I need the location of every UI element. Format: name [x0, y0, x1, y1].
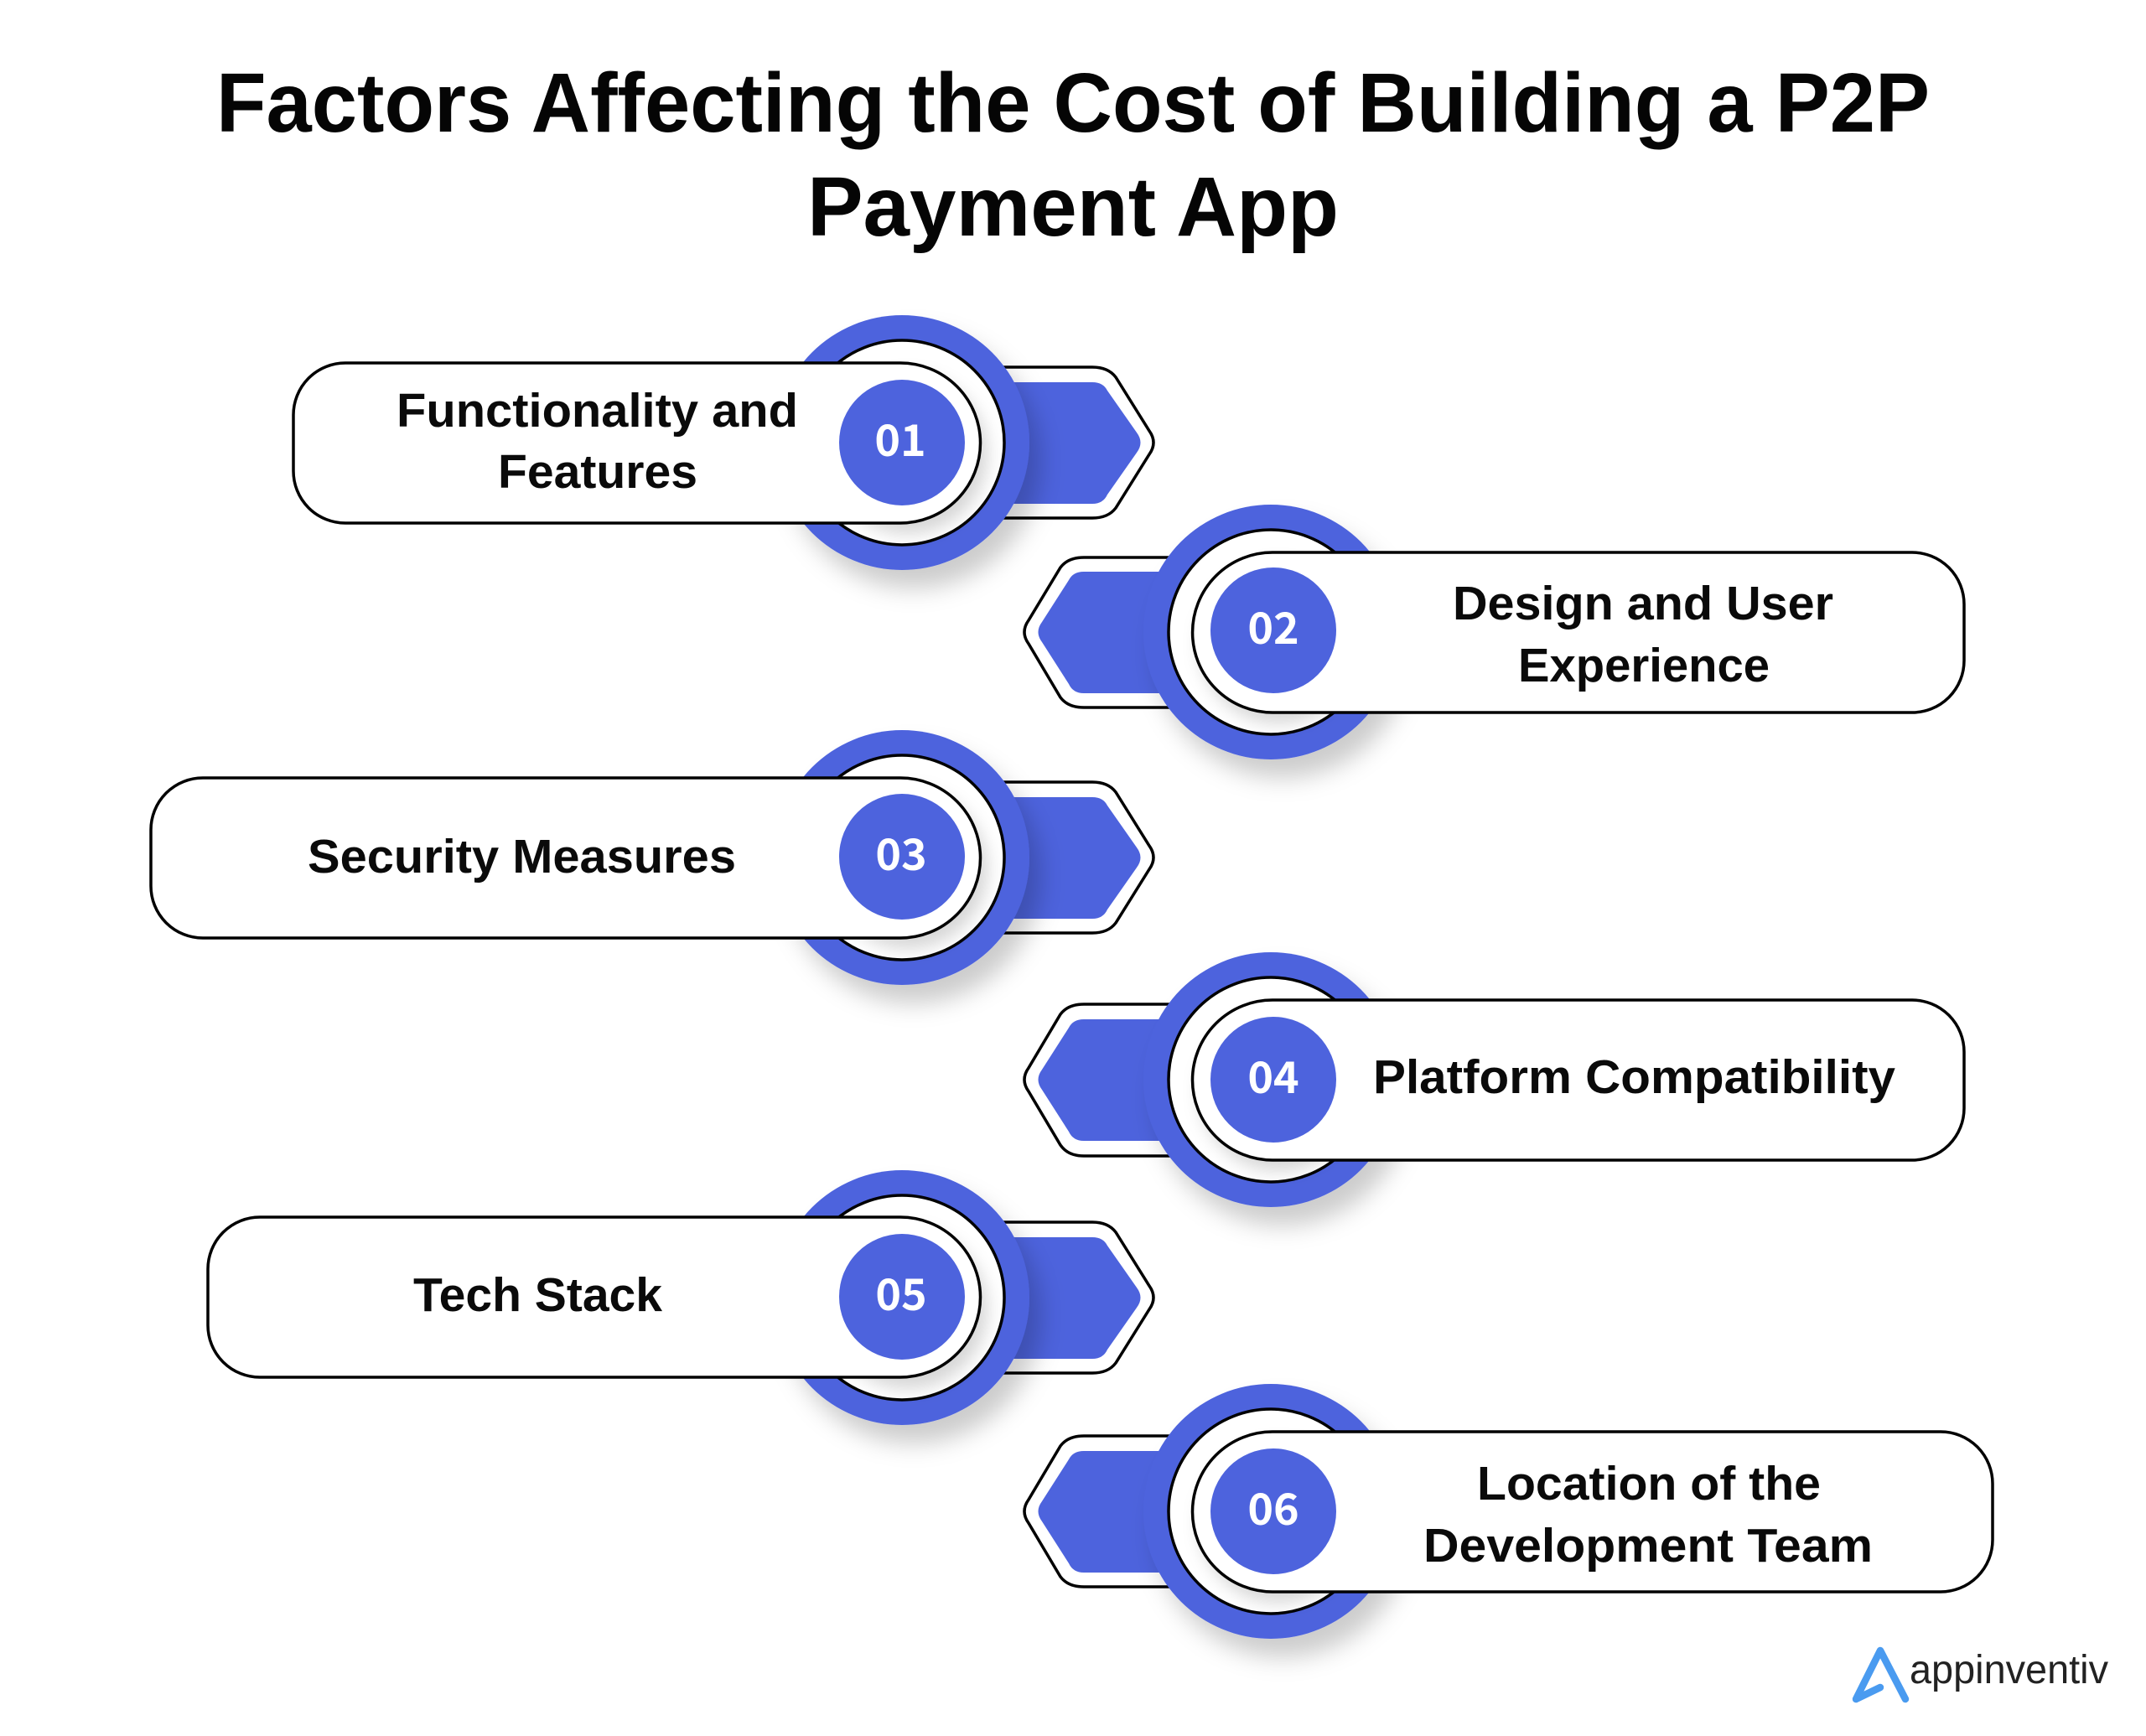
panel: factor 05: [208, 1170, 1153, 1425]
title: Factors Affecting the Cost of Building a P2P: [216, 56, 1930, 150]
arrow: 05: [964, 1222, 1153, 1373]
circle: 05: [775, 1170, 1029, 1425]
number badge: 04: 04: [1247, 1043, 1299, 1106]
label: 01: [397, 384, 798, 499]
label: 04: Platform Compatibility: [1373, 1050, 1895, 1104]
label: 02: Experience: [1518, 639, 1770, 692]
label: 06: Development Team: [1423, 1519, 1873, 1573]
pill: 06: [1192, 1432, 1993, 1592]
arrow: 02: [1024, 557, 1207, 707]
circle: 06: [1143, 1384, 1398, 1639]
number badge: 03: [839, 794, 965, 920]
label: 02: [1453, 577, 1833, 692]
panel: factor 06: [1024, 1384, 1993, 1639]
title: [216, 56, 1930, 254]
title: Payment App: [807, 160, 1339, 254]
logo: appinventiv: [1856, 1648, 2108, 1699]
number badge: 05: [839, 1234, 965, 1360]
number badge: 02: [1210, 567, 1336, 693]
label: 06: Location of the: [1477, 1457, 1821, 1511]
circle: 01: [775, 315, 1029, 570]
pill: 04: [1192, 1000, 1964, 1160]
panel: factor 03: [151, 730, 1153, 985]
panel: factor 01: [293, 315, 1153, 570]
arrow: 06: [1024, 1436, 1207, 1587]
pill: 01: [293, 363, 981, 523]
circle: 02: [1143, 505, 1398, 759]
number badge: 06: 06: [1247, 1474, 1299, 1537]
number badge: 06: [1210, 1448, 1336, 1574]
circle: 04: [1143, 952, 1398, 1207]
number badge: 04: [1210, 1017, 1336, 1143]
number badge: 02: 02: [1247, 593, 1299, 656]
arrow: 03: [964, 782, 1153, 933]
label: 01: Functionality and: [397, 384, 798, 438]
label: 02: Design and User: [1453, 577, 1833, 630]
label: 06: [1423, 1457, 1873, 1573]
pill: 05: [208, 1217, 981, 1377]
label: 05: Tech Stack: [413, 1268, 662, 1322]
icon: logo mark: [1856, 1650, 1905, 1699]
number badge: 03: 03: [875, 820, 927, 883]
pill: 02: [1193, 552, 1964, 713]
number badge: 01: [839, 380, 965, 505]
circle: 03: [775, 730, 1029, 985]
arrow: 01: [964, 367, 1153, 518]
panel: factor 02: [1024, 505, 1964, 759]
arrow: 04: [1024, 1004, 1207, 1156]
number badge: 05: 05: [875, 1260, 927, 1323]
pill: 03: [151, 778, 981, 938]
label: 03: Security Measures: [308, 830, 736, 884]
number badge: 01: 01: [874, 406, 926, 469]
logo wordmark: appinventiv: [1910, 1648, 2108, 1692]
panel: factor 04: [1024, 952, 1964, 1207]
label: 01: Features: [498, 445, 697, 499]
